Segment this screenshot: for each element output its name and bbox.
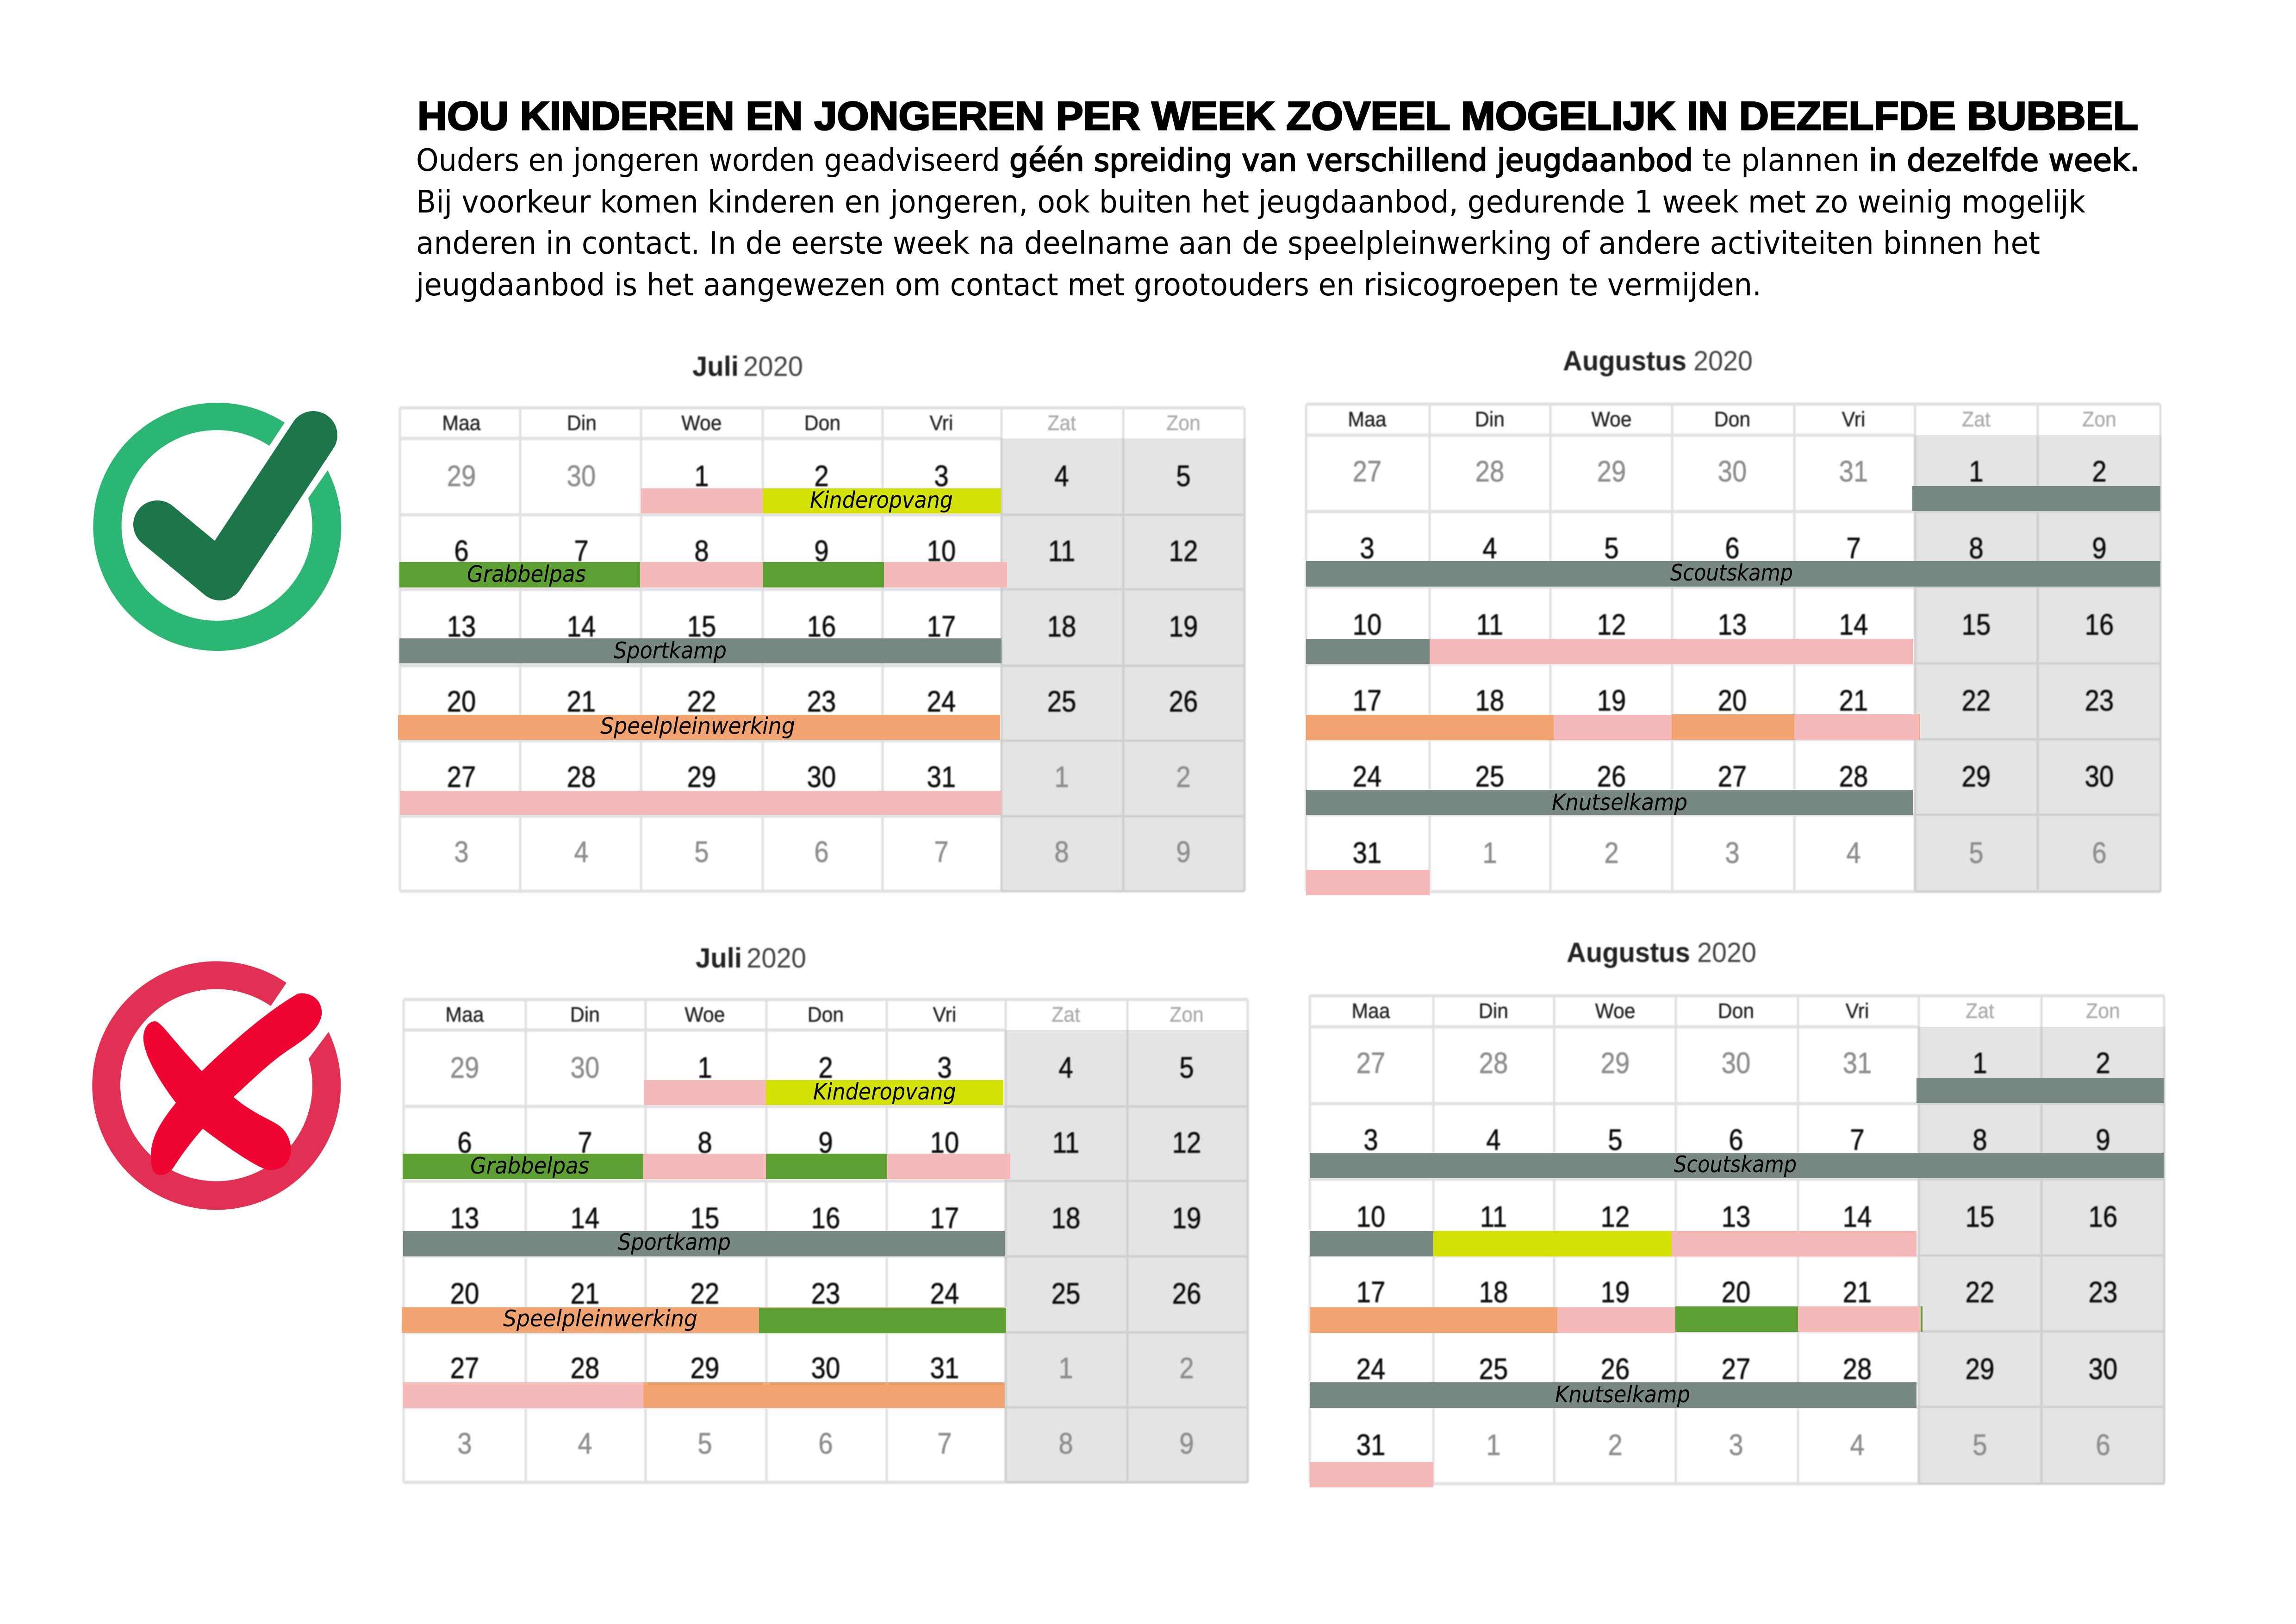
- month heading: 2020: [743, 351, 803, 382]
- weekday header: Din: [567, 412, 597, 435]
- date numbers: 10: [1356, 1200, 1385, 1233]
- date numbers: 3: [1725, 836, 1740, 869]
- date numbers: 2: [2096, 1046, 2110, 1080]
- date numbers: 5: [697, 1427, 712, 1460]
- month heading: [1567, 937, 1756, 968]
- date numbers: 27: [1718, 760, 1747, 793]
- weekday header: Woe: [681, 412, 722, 435]
- weekday header: Din: [1479, 999, 1508, 1023]
- date numbers: 2: [1608, 1428, 1623, 1462]
- date numbers: 1: [694, 459, 709, 493]
- date numbers: 14: [1843, 1200, 1872, 1233]
- month heading: Juli: [696, 943, 742, 974]
- weekday header: Don: [808, 1003, 844, 1026]
- date numbers: 15: [1966, 1200, 1994, 1233]
- panel: bad example July calendar: [402, 943, 1248, 1483]
- date numbers: 30: [807, 760, 836, 793]
- date numbers: 18: [1479, 1275, 1508, 1309]
- date numbers: 2: [1179, 1351, 1194, 1385]
- date numbers: 20: [1718, 684, 1747, 717]
- date numbers: 2: [1176, 760, 1191, 793]
- date numbers: 30: [571, 1051, 599, 1084]
- weekday header: Zat: [1052, 1003, 1080, 1026]
- date numbers: 29: [1962, 760, 1991, 793]
- date numbers: 22: [1966, 1275, 1994, 1309]
- activity labels: Kinderopvang: [810, 487, 953, 513]
- date numbers: 25: [1479, 1352, 1508, 1386]
- activity labels: [470, 1079, 956, 1332]
- date numbers: 27: [450, 1351, 479, 1385]
- date numbers: 4: [1846, 836, 1861, 869]
- activity labels: Speelpleinwerking: [503, 1305, 697, 1332]
- activity labels: Sportkamp: [614, 637, 727, 664]
- month heading: 2020: [1697, 937, 1756, 968]
- activity labels: Kinderopvang: [813, 1079, 956, 1105]
- date numbers: 21: [1839, 684, 1868, 717]
- date numbers: 3: [934, 459, 949, 493]
- date numbers: 24: [1356, 1352, 1385, 1386]
- date numbers: 16: [811, 1201, 840, 1235]
- date numbers: 30: [811, 1351, 840, 1385]
- month heading: [1563, 345, 1753, 376]
- date numbers: 3: [1360, 531, 1375, 565]
- date numbers: 23: [2089, 1275, 2117, 1309]
- date numbers: 14: [571, 1201, 599, 1235]
- activity labels: [1552, 560, 1793, 816]
- activity labels: Grabbelpas: [470, 1153, 589, 1179]
- weekday header: Vri: [930, 412, 953, 435]
- date numbers: 1: [1054, 760, 1069, 793]
- date numbers: 29: [691, 1351, 719, 1385]
- activity labels: Scoutskamp: [1670, 560, 1793, 586]
- month heading: [696, 943, 806, 974]
- weekday header: Zon: [2082, 408, 2116, 431]
- date numbers: 12: [1172, 1126, 1201, 1159]
- date numbers: 4: [1486, 1123, 1501, 1156]
- date numbers: 23: [2085, 684, 2114, 717]
- date numbers: 5: [1608, 1123, 1623, 1156]
- intro text block: te plannen: [1702, 142, 1860, 178]
- date numbers: 3: [457, 1427, 472, 1460]
- weekday header: Vri: [933, 1003, 956, 1026]
- weekday header: Zat: [1962, 408, 1991, 431]
- date numbers: 27: [1353, 455, 1381, 488]
- panel: bad example August calendar: [1310, 937, 2164, 1487]
- date numbers: 23: [807, 685, 836, 718]
- month heading: Juli: [692, 351, 739, 382]
- date numbers: 19: [1172, 1201, 1201, 1235]
- date numbers: 1: [1482, 836, 1497, 869]
- date numbers: 4: [1054, 459, 1069, 493]
- activity bars: [1306, 486, 2160, 895]
- intro text block: Bij voorkeur komen kinderen en jongeren, ook buiten het jeugdaanbod, gedurende 1 week met zo weinig mogelijk: [416, 184, 2085, 220]
- date numbers: 30: [2085, 760, 2114, 793]
- date numbers: 6: [1729, 1123, 1743, 1156]
- date numbers: 31: [1839, 455, 1868, 488]
- date numbers: 11: [1052, 1126, 1079, 1159]
- date numbers: 2: [1604, 836, 1619, 869]
- date numbers: 2: [818, 1051, 833, 1084]
- date numbers: 26: [1169, 685, 1198, 718]
- date numbers: 17: [1356, 1275, 1385, 1309]
- date numbers: 3: [1729, 1428, 1743, 1462]
- date numbers: 18: [1047, 610, 1076, 643]
- date numbers: 11: [1048, 534, 1075, 568]
- date numbers: 9: [1176, 835, 1191, 868]
- date numbers: 17: [927, 610, 956, 643]
- intro text block: anderen in contact. In de eerste week na deelname aan de speelpleinwerking of andere activiteiten binnen het: [416, 225, 2040, 261]
- date numbers: 1: [1058, 1351, 1073, 1385]
- month heading: Augustus: [1567, 937, 1690, 968]
- weekday header: [445, 1003, 1204, 1026]
- weekday header: Maa: [1351, 999, 1390, 1023]
- date numbers: 6: [457, 1126, 472, 1159]
- date numbers: 17: [1353, 684, 1381, 717]
- date numbers: 20: [1722, 1275, 1750, 1309]
- date numbers: 14: [567, 610, 596, 643]
- weekday header: Don: [804, 412, 840, 435]
- date numbers: 29: [1966, 1352, 1994, 1386]
- date numbers: 16: [807, 610, 836, 643]
- date numbers: 15: [687, 610, 716, 643]
- activity labels: Knutselkamp: [1555, 1381, 1690, 1408]
- date numbers: 26: [1597, 760, 1626, 793]
- date numbers: 28: [1475, 455, 1504, 488]
- activity labels: Sportkamp: [618, 1229, 731, 1255]
- date numbers: 8: [697, 1126, 712, 1159]
- date numbers: 28: [567, 760, 596, 793]
- date numbers: 4: [1850, 1428, 1865, 1462]
- date numbers: 7: [937, 1427, 952, 1460]
- date numbers: 9: [818, 1126, 833, 1159]
- date numbers: 27: [1356, 1046, 1385, 1080]
- activity labels: Knutselkamp: [1552, 789, 1687, 816]
- date numbers: 15: [691, 1201, 719, 1235]
- date numbers: 4: [1058, 1051, 1073, 1084]
- date numbers: 5: [1176, 459, 1191, 493]
- weekday header: Woe: [684, 1003, 725, 1026]
- date numbers: [1353, 455, 2114, 869]
- activity labels: [1555, 1151, 1797, 1408]
- date numbers: 4: [574, 835, 589, 868]
- month heading: 2020: [1693, 345, 1753, 376]
- weekday header: [1348, 408, 2116, 431]
- date numbers: 31: [927, 760, 956, 793]
- date numbers: 28: [571, 1351, 599, 1385]
- date numbers: 31: [930, 1351, 959, 1385]
- date numbers: 6: [814, 835, 829, 868]
- month heading: 2020: [747, 943, 806, 974]
- intro text block: géén spreiding van verschillend jeugdaanbod: [1009, 142, 1693, 178]
- date numbers: 31: [1356, 1428, 1385, 1462]
- date numbers: 3: [454, 835, 469, 868]
- weekday header: [1351, 999, 2120, 1023]
- date numbers: 5: [694, 835, 709, 868]
- icon: red cross in ring: [92, 961, 341, 1210]
- panel: good example August calendar: [1306, 345, 2160, 895]
- date numbers: 5: [1972, 1428, 1987, 1462]
- title: HOU KINDEREN EN JONGEREN PER WEEK ZOVEEL MOGELIJK IN DEZELFDE BUBBEL: [417, 94, 2138, 138]
- date numbers: 7: [574, 534, 589, 568]
- date numbers: 13: [447, 610, 476, 643]
- date numbers: 31: [1843, 1046, 1872, 1080]
- date numbers: 5: [1969, 836, 1984, 869]
- weekday header: Woe: [1595, 999, 1636, 1023]
- date numbers: 30: [1718, 455, 1747, 488]
- date numbers: 4: [578, 1427, 592, 1460]
- date numbers: 24: [927, 685, 956, 718]
- weekday header: Vri: [1842, 408, 1865, 431]
- month heading: [692, 351, 803, 382]
- date numbers: [1356, 1046, 2117, 1462]
- date numbers: 1: [1969, 455, 1984, 488]
- date numbers: 7: [934, 835, 949, 868]
- date numbers: 6: [818, 1427, 833, 1460]
- date numbers: 17: [930, 1201, 959, 1235]
- weekday header: Maa: [1348, 408, 1387, 431]
- date numbers: 21: [1843, 1275, 1872, 1309]
- panel: good example July calendar: [398, 351, 1244, 891]
- weekday header: Woe: [1591, 408, 1632, 431]
- date numbers: 12: [1601, 1200, 1630, 1233]
- date numbers: 25: [1475, 760, 1504, 793]
- date numbers: 1: [697, 1051, 712, 1084]
- date numbers: 12: [1597, 608, 1626, 641]
- weekday header: Don: [1714, 408, 1750, 431]
- date numbers: 18: [1052, 1201, 1080, 1235]
- date numbers: 19: [1169, 610, 1198, 643]
- date numbers: 21: [571, 1277, 599, 1310]
- date numbers: 9: [2092, 531, 2107, 565]
- weekday header: Zat: [1966, 999, 1994, 1023]
- date numbers: 30: [2089, 1352, 2117, 1386]
- date numbers: 21: [567, 685, 596, 718]
- activity labels: Scoutskamp: [1674, 1151, 1797, 1178]
- date numbers: 8: [1972, 1123, 1987, 1156]
- weekday header: Zon: [1166, 412, 1201, 435]
- date numbers: 2: [2092, 455, 2107, 488]
- date numbers: 20: [450, 1277, 479, 1310]
- weekday header: Vri: [1846, 999, 1869, 1023]
- date numbers: 7: [1850, 1123, 1865, 1156]
- date numbers: 25: [1047, 685, 1076, 718]
- date numbers: 28: [1843, 1352, 1872, 1386]
- weekday header: [442, 412, 1201, 435]
- intro text block: [415, 142, 2140, 303]
- activity bars: [402, 1080, 1010, 1408]
- date numbers: [450, 1051, 1201, 1460]
- date numbers: 19: [1601, 1275, 1630, 1309]
- activity labels: Speelpleinwerking: [600, 713, 795, 739]
- date numbers: 29: [1597, 455, 1626, 488]
- date numbers: 27: [1722, 1352, 1750, 1386]
- date numbers: 16: [2085, 608, 2114, 641]
- weekday header: Din: [1475, 408, 1505, 431]
- date numbers: 25: [1052, 1277, 1080, 1310]
- date numbers: 29: [1601, 1046, 1630, 1080]
- date numbers: 2: [814, 459, 829, 493]
- weekday header: Don: [1718, 999, 1754, 1023]
- date numbers: 29: [687, 760, 716, 793]
- date numbers: 13: [1718, 608, 1747, 641]
- weekday header: Maa: [442, 412, 481, 435]
- date numbers: 22: [687, 685, 716, 718]
- date numbers: 11: [1480, 1200, 1507, 1233]
- intro text block: jeugdaanbod is het aangewezen om contact met grootouders en risicogroepen te vermijden.: [415, 267, 1761, 303]
- date numbers: 8: [1054, 835, 1069, 868]
- date numbers: 13: [450, 1201, 479, 1235]
- date numbers: 23: [811, 1277, 840, 1310]
- activity labels: [467, 487, 953, 739]
- date numbers: 22: [691, 1277, 719, 1310]
- date numbers: 16: [2089, 1200, 2117, 1233]
- date numbers: 9: [2096, 1123, 2110, 1156]
- date numbers: 7: [578, 1126, 592, 1159]
- date numbers: 5: [1604, 531, 1619, 565]
- date numbers: 8: [694, 534, 709, 568]
- date numbers: 3: [1363, 1123, 1378, 1156]
- date numbers: 24: [930, 1277, 959, 1310]
- activity bars: [1310, 1078, 2164, 1487]
- date numbers: 26: [1172, 1277, 1201, 1310]
- weekday header: Maa: [445, 1003, 484, 1026]
- date numbers: 26: [1601, 1352, 1630, 1386]
- date numbers: 8: [1969, 531, 1984, 565]
- date numbers: 14: [1839, 608, 1868, 641]
- date numbers: 24: [1353, 760, 1381, 793]
- activity labels: Grabbelpas: [467, 561, 586, 587]
- date numbers: 4: [1482, 531, 1497, 565]
- date numbers: 31: [1353, 836, 1381, 869]
- date numbers: 9: [1179, 1427, 1194, 1460]
- date numbers: 10: [927, 534, 956, 568]
- date numbers: 15: [1962, 608, 1991, 641]
- date numbers: 7: [1846, 531, 1861, 565]
- date numbers: 6: [2096, 1428, 2110, 1462]
- date numbers: 1: [1972, 1046, 1987, 1080]
- icon: green check mark in ring: [93, 403, 341, 651]
- weekday header: Din: [570, 1003, 600, 1026]
- date numbers: 12: [1169, 534, 1198, 568]
- date numbers: 30: [1722, 1046, 1750, 1080]
- date numbers: 11: [1476, 608, 1503, 641]
- date numbers: 6: [454, 534, 469, 568]
- intro text block: Ouders en jongeren worden geadviseerd: [416, 142, 1000, 178]
- date numbers: 9: [814, 534, 829, 568]
- intro text block: in dezelfde week.: [1869, 142, 2140, 178]
- date numbers: 5: [1179, 1051, 1194, 1084]
- date numbers: 6: [2092, 836, 2107, 869]
- date numbers: 19: [1597, 684, 1626, 717]
- date numbers: 8: [1058, 1427, 1073, 1460]
- date numbers: 22: [1962, 684, 1991, 717]
- date numbers: [447, 459, 1198, 868]
- activity bars: [398, 488, 1007, 815]
- date numbers: 29: [450, 1051, 479, 1084]
- month heading: Augustus: [1563, 345, 1686, 376]
- weekday header: Zon: [2086, 999, 2120, 1023]
- date numbers: 6: [1725, 531, 1740, 565]
- date numbers: 29: [447, 459, 476, 493]
- date numbers: 13: [1722, 1200, 1750, 1233]
- date numbers: 27: [447, 760, 476, 793]
- weekday header: Zon: [1170, 1003, 1204, 1026]
- date numbers: 18: [1475, 684, 1504, 717]
- date numbers: 3: [937, 1051, 952, 1084]
- date numbers: 10: [1353, 608, 1381, 641]
- date numbers: 30: [567, 459, 596, 493]
- weekday header: Zat: [1047, 412, 1076, 435]
- date numbers: 20: [447, 685, 476, 718]
- date numbers: 28: [1839, 760, 1868, 793]
- date numbers: 10: [930, 1126, 959, 1159]
- date numbers: 1: [1486, 1428, 1501, 1462]
- date numbers: 28: [1479, 1046, 1508, 1080]
